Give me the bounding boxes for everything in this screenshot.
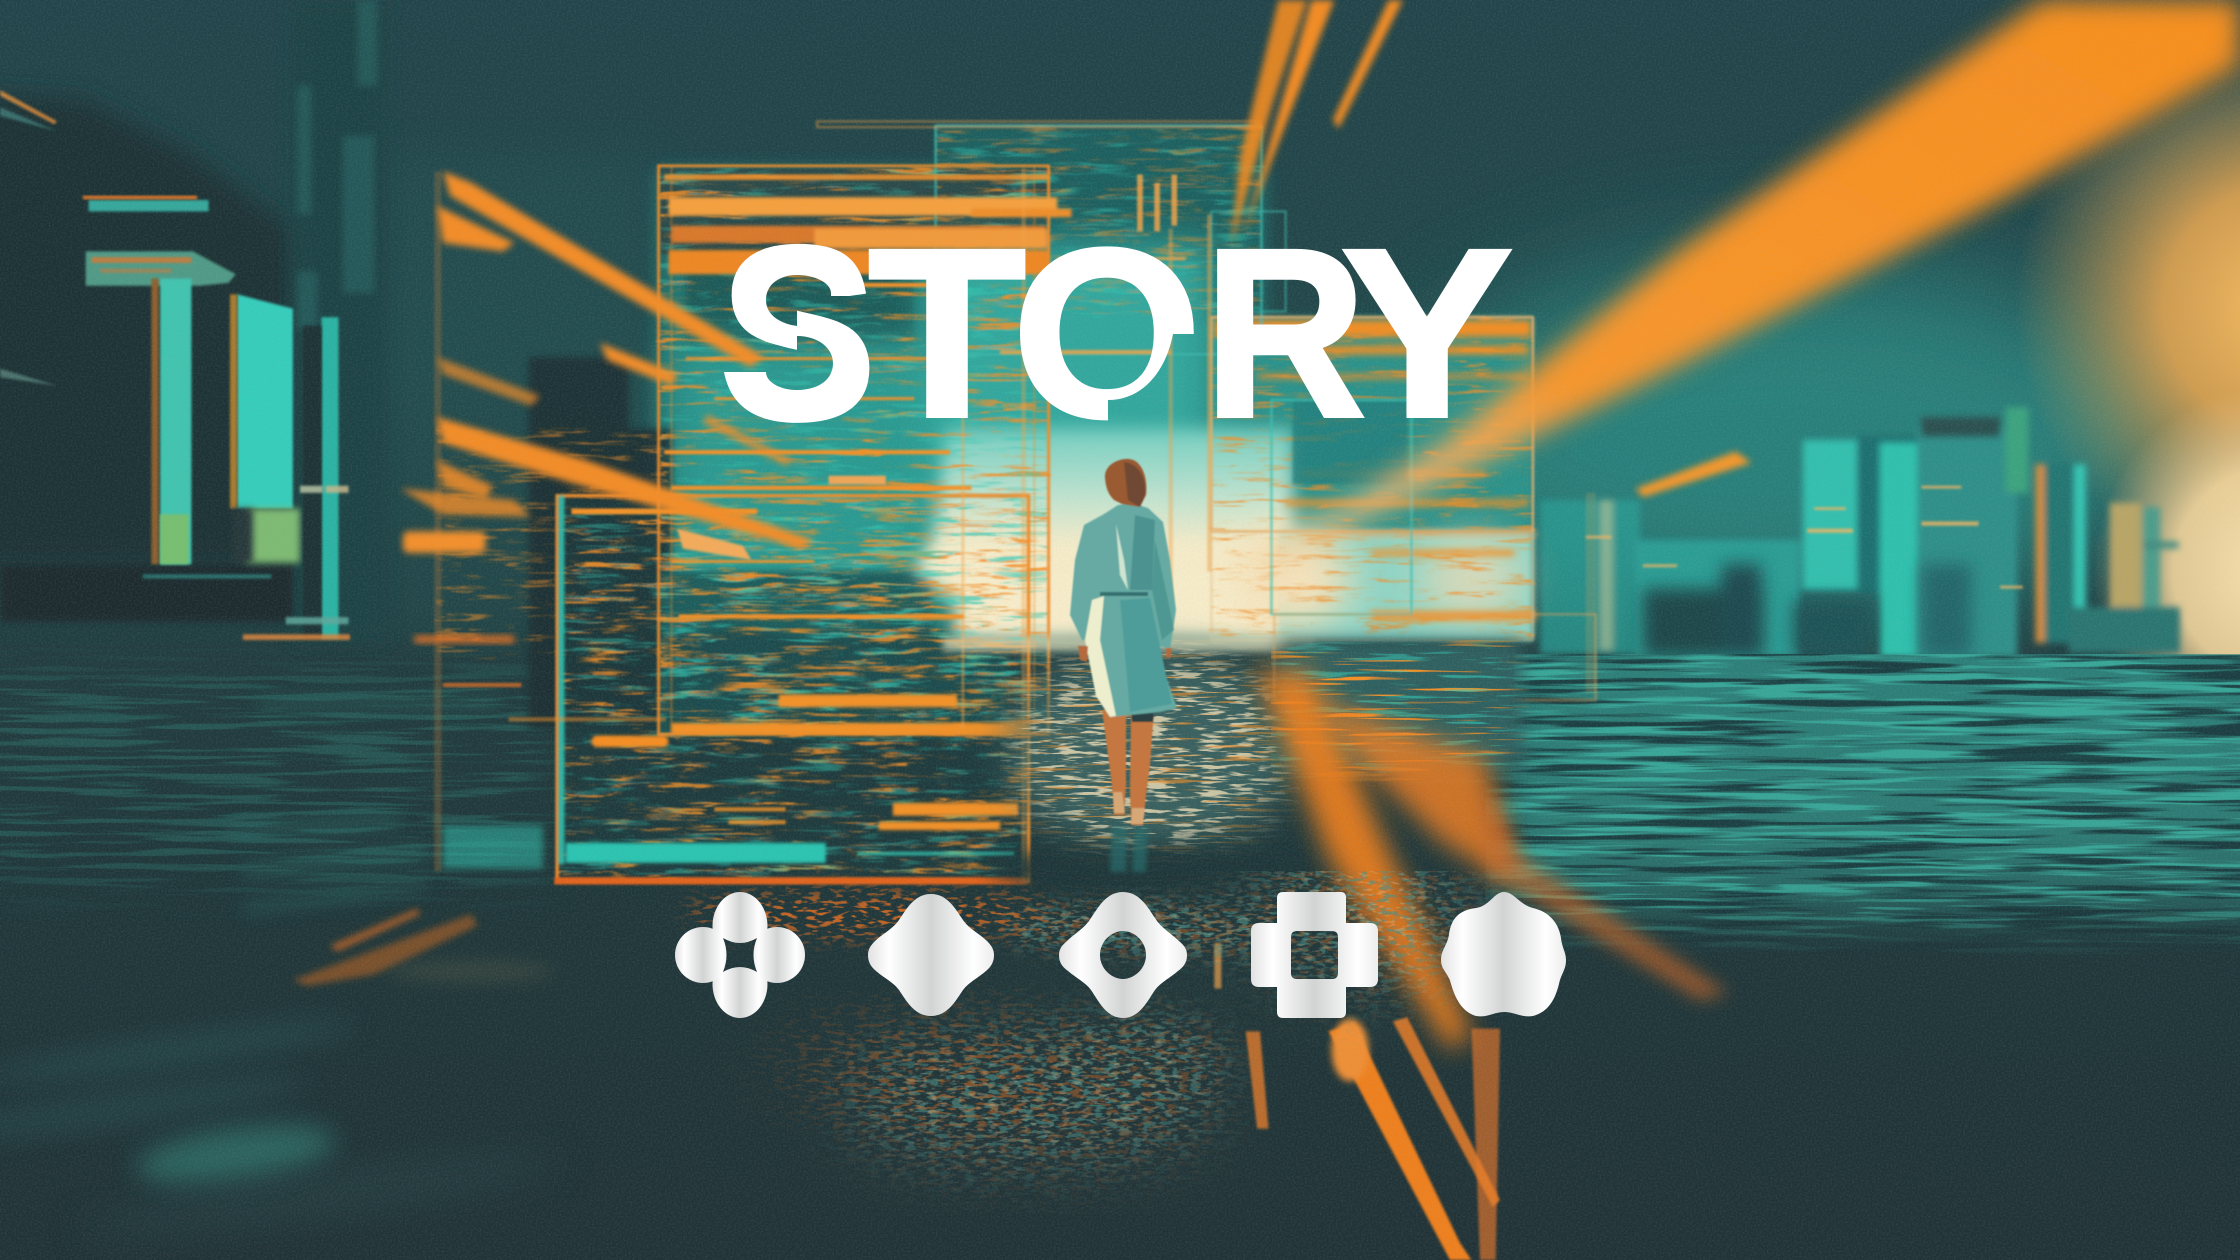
icon: four-lobe ring [1059, 892, 1187, 1018]
right side frames [817, 121, 1596, 700]
right water [1486, 654, 2240, 954]
left teal panel [237, 294, 293, 509]
letter Y: Y [1341, 199, 1513, 467]
central glow [914, 429, 1533, 640]
icon: rounded cross with window [1251, 892, 1378, 1018]
letter R: R [1204, 199, 1366, 467]
letter S: S [722, 199, 874, 467]
sky [0, 0, 2240, 671]
ground [0, 643, 2240, 1260]
frame line textures [437, 126, 1533, 880]
top orange streaks [1231, 0, 1403, 246]
left small streaks [0, 90, 350, 640]
left ground [0, 170, 552, 1204]
feet [1113, 792, 1145, 824]
diagonal orange streaks left [400, 171, 814, 687]
letter T: T [868, 199, 1026, 467]
central orange frame [509, 166, 1211, 884]
legs [1102, 710, 1154, 825]
left orange-teal cap [89, 200, 209, 211]
reflection [1110, 826, 1148, 872]
left building masses [0, 0, 386, 643]
lower orange light trails [1214, 640, 1729, 1260]
right sky teal haze [1400, 264, 2171, 621]
icon row [675, 892, 1566, 1018]
speckled ground [673, 871, 1498, 1208]
thin teal pillar [321, 317, 339, 639]
central frames fill [529, 126, 1533, 880]
dim left frame column [434, 171, 441, 871]
wet ground [943, 637, 1314, 890]
main orange beam [1243, 0, 2240, 569]
hands [1078, 646, 1172, 662]
coat highlights [1085, 596, 1116, 717]
left mist [383, 157, 654, 643]
title: STORY [724, 244, 1513, 423]
warm corner glow [2014, 36, 2240, 579]
icon: scalloped badge [1441, 892, 1566, 1016]
coat [1070, 503, 1177, 717]
person walking away [1070, 459, 1177, 872]
letter O: O [1012, 199, 1202, 467]
icon: smooth four-lobe blob [868, 894, 994, 1016]
warm horizon glow [2093, 386, 2240, 757]
left teal column [160, 279, 191, 564]
hair [1105, 459, 1146, 507]
right skyline [1540, 407, 2180, 657]
icon: four petal clover [675, 892, 805, 1018]
